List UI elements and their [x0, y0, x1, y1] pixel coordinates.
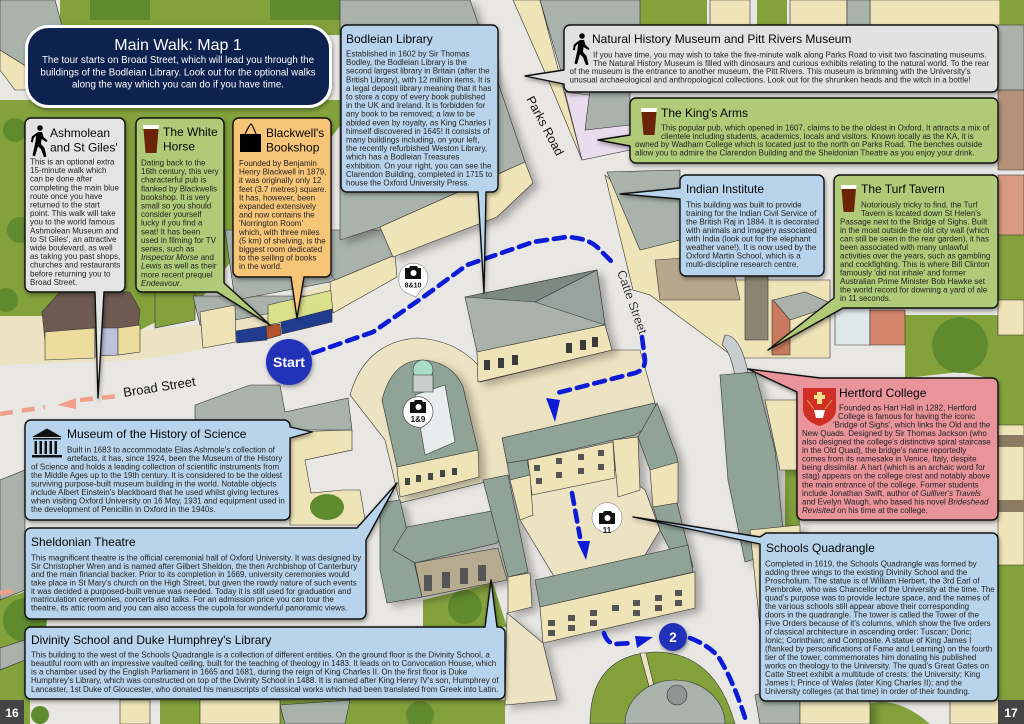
body text: famously 'did not inhale' and former — [840, 268, 966, 278]
body text: 'Bridge of Sighs', which links the Old and the — [833, 421, 991, 430]
Radcliffe Camera and lawn — [590, 652, 735, 724]
body text: used in filming for TV — [141, 236, 217, 245]
body text: Broad Street. — [30, 278, 77, 287]
body text: which has a Bodleian Treasures — [345, 153, 459, 162]
body text: Clarendon Building, completed in 1715 to — [346, 170, 493, 179]
body text: Built in 1683 to accommodate Elias Ashmole's collection of — [67, 446, 276, 454]
body text: unusual archaeological and anthropological collections. Look out for the shrunken heads and the witch in a bottle! — [570, 75, 971, 84]
body text: of classical architecture in ascending order: Tuscan; Doric; — [765, 628, 972, 637]
camera marker 11 — [592, 503, 622, 535]
body text: artefacts, it has, since 1924, been the Museum of the History — [67, 454, 282, 463]
body text: Lewis as well as their — [141, 262, 217, 271]
icon: pint glass — [641, 108, 657, 135]
body text: include Jonathan Swift, author of Gulliver's Travels — [802, 489, 981, 498]
body text: take place in St Mary's church on the High Street, but given the rowdy nature of such events — [31, 578, 357, 587]
body text: Proscholium. The statue is of William Herbert, the 3rd Earl of — [765, 577, 980, 586]
body text: The Natural History Museum is filled with dinosaurs and curious exhibits relating to the natural world. To the rear — [593, 59, 989, 68]
body text: This building to the west of the Schools Quadrangle is a collection of different entities. On the ground floor is the Divinity School, a — [31, 650, 490, 660]
panel: Blackwell's Bookshop — [233, 118, 331, 318]
panel: Divinity School and Duke Humphrey's Library — [25, 580, 505, 699]
body text: clientele including students, academics, locals and visitors. Known locally as the KA, it is — [661, 132, 974, 141]
body text: Sir Christopher Wren and is named after Gilbert Sheldon, the then Archbishop of Canterbury — [31, 562, 357, 571]
body text: This building was built to provide — [686, 200, 802, 210]
heading: Museum of the History of Science — [67, 427, 247, 441]
body text: College is famous for having the iconic — [838, 412, 975, 421]
body text: activities over the years, such as gambling — [840, 252, 990, 260]
heading: The King's Arms — [661, 106, 748, 120]
body text: is a chamber used by the English Parliament in 1665 and 1681, during the reign of King Charles II. On the first floor is Duke — [31, 668, 468, 677]
body text: characterful pub is — [141, 176, 206, 185]
body text: also designed the college's distinctive spiral staircase — [802, 438, 991, 447]
body text: the recently refurbished Weston Library, — [346, 144, 487, 153]
body text: comes from its namesake in Venice, Italy, despite — [802, 455, 977, 464]
panel: The King's Arms — [598, 98, 998, 163]
panel: The Turf Tavern — [768, 175, 998, 350]
body text: being dissimilar. A hart (which is an archaic word for — [802, 463, 986, 472]
buildings south-west — [0, 470, 350, 724]
start marker — [266, 339, 312, 385]
body text: Ashmolean Museum and — [30, 226, 118, 235]
body text: many buildings including, on your left, — [346, 136, 479, 144]
Clarendon Building — [465, 270, 612, 382]
body text: University colleges (at that time) in order of their founding. — [765, 687, 970, 696]
body text: If you have time, you may wish to take the five-minute walk along Parks Road to visit two fascinating museums. — [593, 50, 987, 60]
body text: New Quads. Designed by Sir Thomas Jackson (who — [802, 429, 987, 438]
body text: bookshop. It is very — [141, 193, 210, 202]
body text: to St Giles', an attractive — [30, 235, 117, 244]
body text: It has, however, been — [239, 193, 315, 202]
icon: pint glass — [143, 125, 159, 153]
buildings: Catte Street east side — [605, 170, 905, 376]
body text: small so you should — [141, 202, 211, 210]
body text: Endeavour. — [141, 279, 182, 288]
body text: the various schools still appear above their corresponding — [765, 602, 969, 611]
body text: the British Raj in 1884. It is decorated — [686, 217, 819, 226]
body text: can still be seen in the rear garden), it has — [840, 234, 989, 244]
body text: 15-minute walk which — [30, 166, 106, 175]
body text: 'Norrington Room' — [239, 219, 303, 228]
heading: and St Giles' — [50, 140, 118, 154]
body text: Dating back to the — [141, 158, 206, 168]
camera marker 1&9: 1&9 — [411, 415, 426, 424]
body text: the world record for downing a yard of ale — [840, 286, 988, 294]
body text: Established in 1602 by Sir Thomas — [346, 50, 469, 58]
heading: Horse — [163, 140, 195, 154]
body text: Revisited on his time at the college. — [802, 506, 928, 515]
heading: The Turf Tavern — [861, 182, 945, 196]
heading: Divinity School and Duke Humphrey's Library — [31, 633, 271, 647]
body text: Bodley, the Bodleian Library is the — [346, 58, 467, 67]
intro text: The tour starts on Broad Street, which will lead you through the — [42, 55, 314, 66]
body text: matriculation ceremonies, concerts and talks. For an admission price you can tour the — [31, 595, 334, 604]
heading: The White — [163, 125, 218, 139]
body text: Ionic; Corinthian; and Composite. A statue of King James I — [765, 636, 971, 645]
body text: with animals and imagery associated — [685, 226, 817, 235]
Clarendon forecourt and Sheldonian courtyard paving — [350, 338, 655, 503]
body text: series, such as — [141, 244, 194, 254]
body text: include Albert Einstein's blackboard that he used whilst giving lectures — [31, 488, 278, 497]
body text: adding three wings to the existing Divinity School and the — [765, 568, 968, 577]
body text: and cockfighting. This is where Bill Clinton — [840, 260, 989, 269]
body text: as taking you past shops, — [30, 252, 120, 261]
body text: of Science and holds a leading collection of scientific instruments from — [31, 462, 279, 471]
body text: churches and restaurants — [30, 261, 120, 270]
start marker: Start — [273, 354, 305, 370]
body text: beautiful room with an impressive vaulted ceiling, built for the teaching of theology in 1483. It leads on to Convocation House, which — [31, 659, 496, 668]
body text: with India (look out for the elephant — [685, 234, 811, 243]
optional walk route: Broad Street dashes — [0, 396, 118, 593]
body text: the main entrance of the college. Former students — [802, 480, 979, 489]
page number 16 — [0, 700, 24, 724]
camera marker 11: 11 — [603, 526, 612, 535]
body text: Founded as Hart Hall in 1282, Hertford — [839, 404, 976, 412]
panel: Schools Quadrangle — [633, 517, 998, 701]
body text: This magnificent theatre is the official ceremonial hall of Oxford University. It was designed by — [31, 554, 361, 562]
body text: Notoriously tricky to find, the Turf — [861, 200, 978, 210]
body text: any book to be removed; a law to be — [346, 110, 476, 119]
body text: surviving purpose-built museum building in the world. Notable objects — [31, 479, 276, 488]
body text: doors in the quadrangle. The tower is called the Tower of the — [765, 611, 980, 620]
icon: museum columns — [32, 428, 62, 458]
body text: in the UK and Ireland. It is forbidden for — [346, 101, 486, 110]
body text: to store a copy of every book published — [346, 92, 485, 102]
body text: Oxford Martin School, which is a — [686, 251, 801, 260]
body text: seat! It has been — [141, 227, 200, 236]
body text: Founded by Benjamin — [239, 159, 317, 168]
heading: Hertford College — [839, 386, 927, 400]
body text: theatre, its attic room and you can also access the cupola for wonderful panoramic views. — [31, 603, 347, 612]
panel: Ashmolean and St Giles' — [25, 118, 125, 398]
body text: This popular pub, which opened in 1607, claims to be the oldest in Oxford. It attracts a mix of — [661, 124, 990, 132]
icon: shopping bag — [240, 124, 261, 152]
body text: can be done after — [30, 175, 93, 184]
body text: quad's purpose was to provide lecture space, and the names of — [765, 594, 990, 603]
body text: in the world. — [239, 262, 282, 271]
body text: biggest room dedicated — [239, 245, 322, 254]
body text: Lancaster, 1st Duke of Gloucester, who donated his manuscripts of classical works which had been translated from Greek into Latin. — [31, 685, 498, 694]
camera marker 1&9 — [403, 397, 433, 428]
icon: walking person — [31, 125, 48, 157]
body text: Five Orders because of it's columns, which show the five orders — [765, 619, 991, 628]
body text: of the museum is the entrance to another museum, the Pitt Rivers. This museum is brimming with the University's — [570, 67, 971, 76]
street label: Catte Street: Catte Street — [614, 268, 650, 336]
body text: wide boulevard, as well — [29, 244, 113, 252]
body text: been associated with many unlawful — [840, 243, 968, 252]
camera marker 8&10: 8&10 — [405, 282, 421, 290]
icon: college shield — [803, 388, 836, 426]
icon: pint glass — [841, 185, 856, 212]
panel: Natural History Museum and Pitt Rivers Museum — [525, 25, 998, 92]
body text: point. This walk will take — [30, 209, 116, 218]
body text: route once you have — [30, 192, 103, 201]
body text: it was originally only 12 — [239, 176, 322, 185]
Sheldonian Theatre — [382, 360, 479, 497]
panel: Hertford College — [748, 369, 998, 520]
Bodleian Weston Library building — [340, 0, 533, 257]
body text: the Middle Ages up to the 19th century. It is considered to be the oldest — [31, 471, 283, 480]
body text: in 11 seconds. — [840, 294, 891, 303]
body text: Pembroke, who was Chancellor of the University at the time. The — [765, 585, 995, 594]
Museum of the History of Science building — [195, 385, 366, 525]
panel: The White Horse — [136, 118, 270, 325]
body text: Tavern is located down St Helen's — [861, 209, 981, 218]
body text: Australian Prime Minister Bob Hawke set — [840, 277, 986, 286]
body text: completing the main blue — [30, 183, 119, 192]
body text: in the Old Quad), the bridge's name reportedly — [802, 446, 966, 455]
body text: (flanked by personifications of Fame and Learning) on the fourth — [765, 645, 992, 654]
route arrowhead to Schools Quadrangle — [546, 398, 560, 422]
street label: Broad Street: Broad Street — [122, 374, 197, 400]
body text: to the selling of books — [239, 254, 316, 263]
heading: Ashmolean — [50, 126, 110, 140]
body text: before returning you to — [30, 269, 111, 278]
body text: and the main financial backer. Prior to its completion in 1669, university ceremonies would — [31, 570, 349, 579]
body text: works on theology to the University. The quad's Great Gates on — [764, 662, 989, 671]
body text: feet (3.7 metres) square. — [239, 185, 327, 194]
heading: Schools Quadrangle — [766, 541, 875, 555]
page number 16: 16 — [5, 706, 19, 720]
street label: Parks Road: Parks Road — [523, 94, 566, 158]
panel: Sheldonian Theatre — [25, 483, 397, 619]
body text: expanded extensively — [239, 202, 316, 211]
body text: (5 km) of shelving, is the — [239, 236, 326, 245]
panel: Indian Institute — [620, 175, 824, 276]
body text: Catte Street exhibit a multitude of crests: the University; King — [765, 670, 980, 679]
heading: Sheldonian Theatre — [31, 535, 136, 549]
camera marker 8&10 — [399, 263, 428, 297]
body text: you to the world famous — [30, 218, 115, 227]
route dashes — [313, 237, 747, 724]
intro text: buildings of the Bodleian Library. Look out for the optional walks — [40, 67, 316, 78]
heading: Natural History Museum and Pitt Rivers Museum — [592, 32, 851, 46]
heading: Blackwell's — [266, 126, 324, 140]
body text: flanked by Blackwells — [141, 184, 217, 193]
body text: stag) appears on the college crest and notably above — [802, 472, 991, 481]
Schools Quadrangle and Divinity School — [380, 403, 695, 705]
body text: house the Oxford University Press. — [346, 178, 470, 187]
heading: Bodleian Library — [346, 32, 433, 46]
body text: Passage next to the Bridge of Sighs. Built — [840, 218, 988, 226]
buildings: north of Broad Street — [0, 0, 397, 365]
body text: tier of the tower, commemorates him donating his published — [765, 653, 976, 662]
body text: multi-discipline research centre. — [686, 260, 798, 269]
panel: title — [26, 26, 330, 106]
body text: British Library), with 12 million items. It is — [346, 75, 490, 84]
heading: Main Walk: Main Walk: Map 1 — [114, 37, 242, 54]
body text: consider yourself — [141, 210, 202, 219]
body text: Completed in 1619, the Schools Quadrangle was formed by — [765, 560, 977, 568]
body text: 16th century, this very — [141, 167, 219, 176]
Natural History area and King's Arms — [513, 0, 1024, 565]
body text: second largest library in Britain (after the — [346, 67, 490, 76]
body text: and Evelyn Waugh, who based his novel Brideshead — [802, 497, 988, 506]
body text: Henry Blackwell in 1879, — [239, 168, 327, 177]
route arrowhead to stop 2 — [635, 636, 653, 648]
body text: more recent prequel — [141, 270, 213, 279]
body text: training for the Indian Civil Service of — [686, 209, 817, 218]
body text: it was decided a purposed-built venue was needed. Today it is still used for graduation and — [31, 587, 351, 596]
body text: exhibition. On your right, you can see the — [346, 161, 492, 170]
body text: abided even by royalty, as King Charles I — [346, 118, 491, 127]
panel: Bodleian Library — [341, 25, 498, 293]
stop marker 2 — [659, 623, 687, 651]
body text: Inspector Morse and — [141, 253, 214, 262]
route arrowhead through quad — [577, 541, 590, 560]
page number 17: 17 — [1004, 706, 1018, 720]
Hertford College buildings — [720, 372, 1000, 724]
body text: weather vane!). It is now used by the — [685, 243, 817, 252]
body text: in the moat outside the old city wall (which — [840, 226, 989, 235]
body text: allow you to admire the Clarendon Building and the Sheldonian Theatre as you enjoy your drink. — [635, 148, 975, 157]
body text: and now contains the — [239, 211, 315, 220]
body text: owned by Wadham College which is located just to the north on Parks Road. The benches outside — [635, 140, 983, 149]
heading: Indian Institute — [686, 182, 764, 196]
body text: James I; Prince of Wales (later King Charles II); and the — [765, 679, 963, 688]
stop marker 2: 2 — [669, 630, 677, 645]
intro text: along the way which you can do if you have time. — [72, 80, 284, 91]
body text: the development of Penicillin in Oxford in the 1940s. — [31, 505, 216, 514]
heading: Bookshop — [266, 140, 320, 154]
body text: a legal deposit library meaning that it has — [346, 84, 491, 93]
body text: Humphrey's Library, which was constructed on top of the Divinity School in 1488. It is named after King Henry IV's son, Humphrey of — [31, 676, 499, 685]
body text: which, with three miles — [238, 228, 319, 237]
body text: returned to the start — [30, 200, 101, 210]
icon: walking person — [573, 33, 590, 65]
body text: himself discovered in 1645! It consists of — [346, 127, 490, 136]
body text: This is an optional extra — [30, 158, 115, 166]
body text: when visiting Oxford University on 16 May, 1931 and equipment used in — [30, 496, 285, 505]
body text: lucky if you find a — [141, 219, 203, 228]
panel: Museum of the History of Science — [25, 420, 312, 520]
page number 17 — [998, 700, 1024, 724]
